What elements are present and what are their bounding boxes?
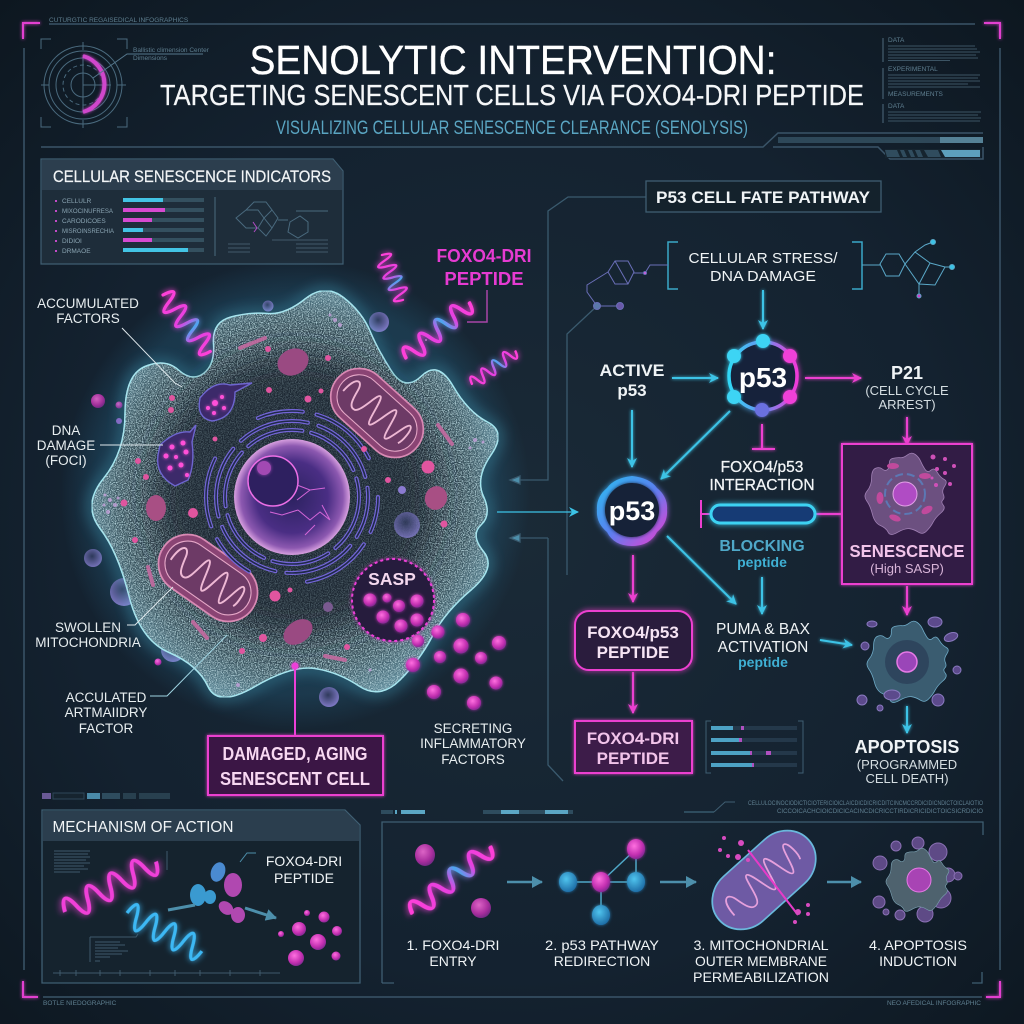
data strip: CICCOICACHCIOICDICICACINCDICRICCTIRDICRICIDICTOICSICRDICIO bbox=[777, 808, 983, 815]
magenta helix bbox=[59, 851, 162, 922]
organelles bbox=[102, 314, 484, 687]
icon: apoptotic cell bbox=[857, 617, 961, 711]
cell body bbox=[92, 291, 498, 697]
top right notes bbox=[883, 37, 981, 123]
label: P21: ARREST) bbox=[878, 397, 936, 412]
box: senescence: SENESCENCE bbox=[850, 541, 964, 561]
cell halo bbox=[60, 260, 530, 730]
cellular stress node bbox=[668, 242, 862, 289]
box: FOXO4-DRI peptide: FOXO4-DRI bbox=[587, 729, 679, 748]
cellular stress node: DNA DAMAGE bbox=[710, 268, 816, 285]
label: DNA damage: DAMAGE bbox=[37, 438, 95, 453]
cyan helix bbox=[122, 902, 207, 962]
cellular stress node: CELLULAR STRESS/ bbox=[688, 250, 838, 267]
box: FOXO4-DRI peptide bbox=[575, 721, 692, 773]
title bbox=[160, 37, 864, 112]
SASP label: SASP bbox=[368, 569, 416, 589]
label: P21 bbox=[865, 363, 949, 412]
blocking peptide bar bbox=[701, 500, 815, 528]
title: TARGETING SENESCENT CELLS VIA FOXO4-DRI PEPTIDE bbox=[160, 80, 864, 112]
step 2: 2. p53 PATHWAY bbox=[545, 937, 660, 953]
indicator bars: DRMAOE bbox=[62, 248, 91, 255]
small status bars bbox=[42, 793, 170, 799]
mitochondria bbox=[147, 357, 435, 633]
label: active p53 bbox=[600, 361, 664, 400]
hatched strip and progress bar bbox=[778, 137, 983, 158]
title: SENOLYTIC INTERVENTION: bbox=[250, 37, 776, 83]
label: PUMA and BAX activation: peptide bbox=[738, 654, 788, 670]
label: blocking peptide: peptide bbox=[737, 554, 787, 570]
protein complex bbox=[168, 853, 276, 923]
molecule: right bbox=[862, 240, 954, 298]
indicator bars bbox=[55, 198, 204, 255]
label: active p53: p53 bbox=[617, 381, 647, 400]
peptide label: FOXO4-DRI bbox=[266, 853, 342, 869]
chemical structure bbox=[215, 197, 328, 256]
panel notes bbox=[53, 851, 280, 976]
p53 node: lower bbox=[597, 476, 667, 546]
arrow 1 bbox=[507, 881, 542, 883]
label: accumulated factors: ACCUMULATED bbox=[37, 296, 139, 311]
label: secreting inflammatory factors: SECRETING bbox=[434, 721, 512, 736]
senescent cell bbox=[92, 291, 498, 697]
panel heading: MECHANISM OF ACTION bbox=[52, 819, 234, 836]
label: DNA damage: DNA bbox=[52, 423, 80, 438]
box: senescence bbox=[842, 444, 972, 584]
molecule: left bbox=[587, 261, 668, 310]
label: swollen mitochondria: SWOLLEN bbox=[55, 620, 121, 635]
SASP vesicle bbox=[352, 559, 434, 641]
top right notes: EXPERIMENTAL bbox=[888, 66, 938, 73]
label: swollen mitochondria: MITOCHONDRIA bbox=[35, 635, 141, 650]
released particles bbox=[278, 910, 342, 966]
indicator bars: CARODICOES bbox=[62, 218, 106, 225]
label: apoptosis bbox=[855, 737, 959, 786]
label: FOXO4-DRI peptide: PEPTIDE bbox=[444, 268, 524, 289]
callout: damaged aging senescent cell: DAMAGED, AGING bbox=[222, 744, 368, 764]
heading: p53 cell fate pathway: P53 CELL FATE PATHWAY bbox=[656, 188, 871, 207]
box: FOXO4-DRI peptide: PEPTIDE bbox=[597, 749, 669, 768]
p53 node: lower: p53 bbox=[609, 496, 655, 526]
label: FOXO4-DRI peptide bbox=[436, 245, 532, 322]
arrow 2 bbox=[660, 881, 696, 883]
label: PUMA and BAX activation bbox=[716, 621, 811, 670]
vesicles with DNA foci bbox=[158, 383, 252, 486]
radar icon bbox=[41, 39, 210, 128]
arrow 3 bbox=[827, 881, 861, 883]
indicator bars: DIDIOI bbox=[62, 238, 82, 245]
connector lines between cell and pathway bbox=[497, 197, 646, 781]
label: DNA damage bbox=[37, 423, 163, 468]
label: P21: (CELL CYCLE bbox=[865, 383, 949, 398]
box: FOXO4/p53 peptide: FOXO4/p53 bbox=[587, 623, 679, 642]
SASP secretion bbox=[352, 559, 506, 710]
step 4 bbox=[869, 837, 967, 969]
step 3: PERMEABILIZATION bbox=[693, 969, 829, 985]
label: secreting inflammatory factors bbox=[420, 721, 526, 767]
label: apoptosis: APOPTOSIS bbox=[855, 737, 959, 757]
step 3 bbox=[693, 818, 829, 985]
step 2 bbox=[545, 839, 660, 969]
arrows: magenta bbox=[633, 378, 907, 713]
box: FOXO4/p53 peptide: PEPTIDE bbox=[597, 643, 669, 662]
label: P21: P21 bbox=[891, 363, 923, 383]
sequence data bars bbox=[706, 721, 803, 773]
membrane glow bbox=[92, 291, 498, 697]
label: PUMA and BAX activation: ACTIVATION bbox=[718, 639, 808, 656]
label: apoptosis: CELL DEATH) bbox=[865, 771, 949, 786]
box: senescence: (High SASP) bbox=[870, 561, 944, 576]
callout: damaged aging senescent cell: SENESCENT CELL bbox=[220, 769, 370, 789]
outer vesicles bbox=[84, 300, 486, 707]
panel: cellular senescence indicators bbox=[41, 159, 343, 264]
frame captions: BOTLE NIEDOGRAPHIC bbox=[43, 1000, 117, 1007]
radar icon: Dimensions bbox=[133, 55, 168, 62]
label: DNA damage: (FOCI) bbox=[45, 453, 87, 468]
callout: damaged aging senescent cell bbox=[208, 662, 383, 795]
label: blocking peptide: BLOCKING bbox=[719, 538, 805, 555]
subtitle: VISUALIZING CELLULAR SENESCENCE CLEARANCE (SENOLYSIS) bbox=[276, 117, 748, 139]
panel: mechanism of action bbox=[42, 810, 360, 983]
indicator bars: MISROINSRECHIA bbox=[62, 228, 115, 235]
peptide helices bbox=[155, 251, 519, 389]
label: PUMA and BAX activation: PUMA & BAX bbox=[716, 621, 811, 638]
box: FOXO4/p53 peptide bbox=[575, 611, 692, 670]
label: accumulated artmaildry factor: ARTMAIIDRY bbox=[65, 705, 147, 720]
step 3: OUTER MEMBRANE bbox=[695, 953, 827, 969]
label: accumulated factors: FACTORS bbox=[56, 311, 120, 326]
p53 node: upper bbox=[727, 334, 797, 417]
label: accumulated artmaildry factor: FACTOR bbox=[79, 721, 134, 736]
SASP particles bbox=[364, 594, 506, 710]
frame captions: NEO AFEDICAL INFOGRAPHIC bbox=[887, 1000, 981, 1007]
heading: p53 cell fate pathway bbox=[646, 181, 881, 212]
step 4: 4. APOPTOSIS bbox=[869, 937, 967, 953]
indicator bars: MIXOCINUFRESA bbox=[62, 208, 114, 215]
label: swollen mitochondria bbox=[35, 587, 173, 650]
top right notes: MEASUREMENTS bbox=[888, 91, 944, 98]
indicator bars: CELLULR bbox=[62, 198, 92, 205]
label: accumulated artmaildry factor bbox=[65, 635, 227, 736]
step 1: ENTRY bbox=[429, 953, 477, 969]
step 2: REDIRECTION bbox=[554, 953, 650, 969]
endoplasmic reticulum bbox=[206, 411, 378, 583]
label: secreting inflammatory factors: FACTORS bbox=[441, 752, 505, 767]
panel heading: CELLULAR SENESCENCE INDICATORS bbox=[53, 168, 331, 186]
label: FOXO4/p53 interaction bbox=[709, 459, 815, 494]
frame captions: CUTURGTIC REGAISEDICAL INFOGRAPHICS bbox=[49, 17, 189, 24]
step 4: INDUCTION bbox=[879, 953, 957, 969]
step 3: 3. MITOCHONDRIAL bbox=[694, 937, 829, 953]
p53 node: upper: p53 bbox=[739, 362, 787, 393]
label: apoptosis: (PROGRAMMED bbox=[857, 757, 957, 772]
label: active p53: ACTIVE bbox=[600, 361, 664, 380]
step 1: 1. FOXO4-DRI bbox=[406, 937, 500, 953]
top right notes: DATA bbox=[888, 103, 905, 110]
label: FOXO4-DRI peptide: FOXO4-DRI bbox=[436, 245, 532, 266]
peptide label line 2: PEPTIDE bbox=[274, 870, 334, 886]
arrows: cyan bbox=[632, 290, 907, 733]
top right notes: DATA bbox=[888, 37, 905, 44]
cytoplasm bbox=[155, 355, 435, 635]
label: FOXO4/p53 interaction: INTERACTION bbox=[709, 477, 815, 494]
label: blocking peptide bbox=[719, 538, 805, 570]
data strip bbox=[381, 800, 983, 815]
label: accumulated factors bbox=[37, 296, 182, 387]
radar icon: Ballistic climension Center bbox=[133, 47, 210, 54]
label: accumulated artmaildry factor: ACCULATED bbox=[66, 690, 147, 705]
panel: four steps bbox=[382, 818, 983, 985]
label: secreting inflammatory factors: INFLAMMATORY bbox=[420, 736, 526, 751]
icon: senescent cell bbox=[865, 453, 956, 534]
label: FOXO4/p53 interaction: FOXO4/p53 bbox=[721, 459, 803, 476]
step 1 bbox=[406, 840, 500, 969]
nucleus bbox=[234, 439, 350, 555]
